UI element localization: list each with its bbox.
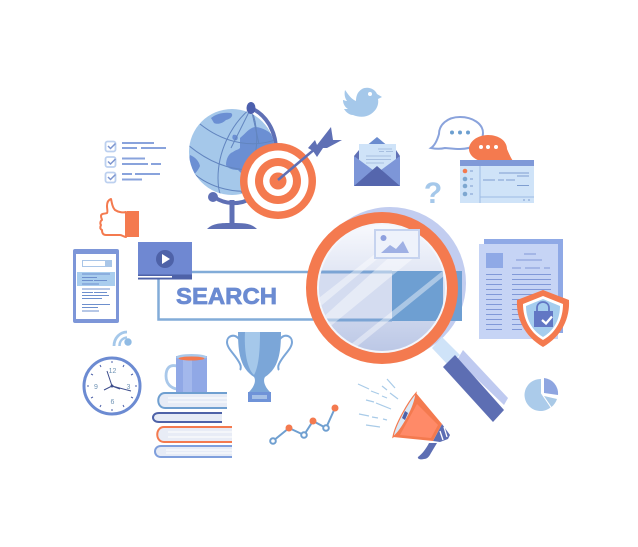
icon: checklist (106, 142, 166, 182)
infographic: search concept illustration (73, 88, 570, 460)
magnifying glass (304, 207, 508, 422)
icon: stack of books (153, 393, 232, 457)
lens ring (306, 212, 458, 364)
search bar (158, 272, 418, 320)
icon: wifi (114, 332, 132, 346)
icon: speech bubbles (431, 117, 513, 162)
icon: document (479, 239, 563, 339)
search button right end (440, 271, 462, 321)
icon: security shield (517, 290, 569, 347)
icon: thumbs up (100, 199, 139, 237)
lens back shadow (314, 207, 466, 359)
icon: image frame (375, 230, 419, 258)
icon: globe with stand (188, 102, 280, 229)
lens glare (320, 255, 444, 346)
icon: browser window (460, 160, 534, 203)
icon: envelope with letter (354, 137, 400, 186)
icon: video player (138, 242, 192, 280)
icon: phone (73, 249, 119, 323)
icon: megaphone (358, 379, 450, 459)
icon: target with arrow (240, 127, 342, 219)
heading: search: SEARCH (176, 283, 277, 309)
icon: coffee mug (166, 354, 207, 392)
icon: clock: 6 (111, 399, 115, 406)
icon: question mark: ? (424, 177, 442, 210)
handle (432, 337, 508, 422)
icon: clock: 9 (94, 384, 98, 391)
line chart (270, 404, 338, 444)
icon: clock: 3 (127, 384, 131, 391)
icon: pie chart (525, 378, 558, 411)
icon: clock (84, 358, 140, 414)
icon: clock: 12 (109, 368, 116, 375)
icon: twitter bird (343, 88, 382, 117)
icon: trophy (227, 332, 292, 402)
